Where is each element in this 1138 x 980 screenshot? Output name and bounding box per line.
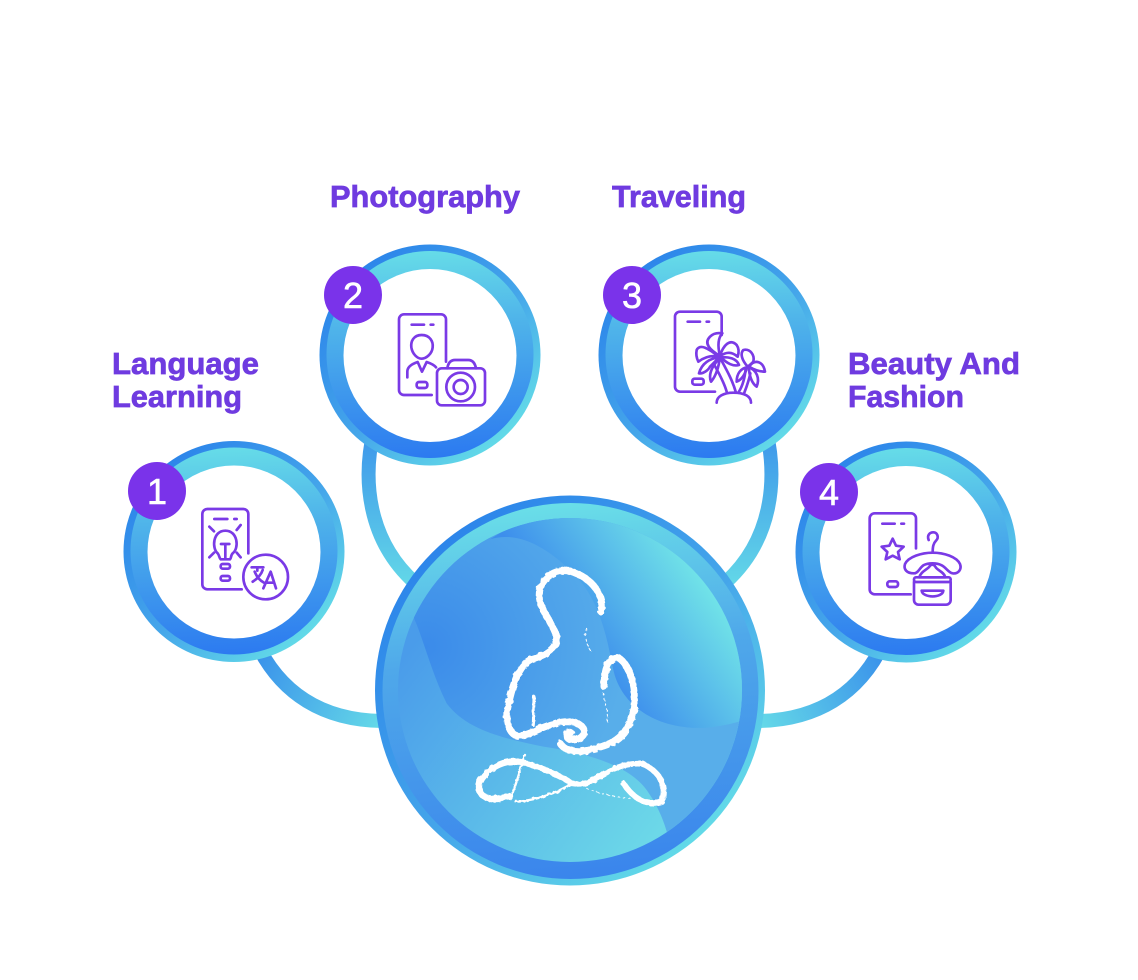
icon: phone with star, hanger and cream jar [870,513,961,605]
panel: central circle with meditating figure [370,490,770,890]
icon: phone with light bulb and translate [202,509,288,599]
heading: Language Learning [112,346,259,414]
connector: circle 1 to center [255,640,385,721]
panel: circle 4 beauty and fashion [796,442,1016,662]
disc with wave pattern [398,518,742,862]
heading: Photography: Photography [330,179,521,214]
heading: Beauty And Fashion [848,346,1020,414]
badge 3: 3 [622,275,642,316]
connector: circle 2 to center [369,430,414,582]
inner ring [382,503,758,879]
panel: circle 3 traveling [598,244,820,466]
heading: Beauty And Fashion: Fashion [848,379,964,414]
badge 1 [128,462,186,520]
badge 2 [324,266,382,324]
heading: Beauty And Fashion: Beauty And [848,346,1020,381]
badge 3 [603,266,661,324]
badge 4 [800,463,858,521]
heading: Language Learning: Learning [112,379,242,414]
connector: circle 3 to center [726,430,771,582]
badge 2: 2 [343,275,363,316]
icon: phone with portrait and camera [399,314,485,405]
heading: Traveling: Traveling [612,179,746,214]
badge 1: 1 [147,471,167,512]
badge 4: 4 [819,472,839,513]
outer ring [375,496,765,886]
connector: circle 4 to center [755,640,885,721]
heading: Language Learning: Language [112,346,259,381]
panel: circle 2 photography [320,244,540,466]
panel: circle 1 language learning [124,441,344,662]
icon: meditating figure [479,571,663,803]
icon: phone with palm trees [675,312,765,403]
